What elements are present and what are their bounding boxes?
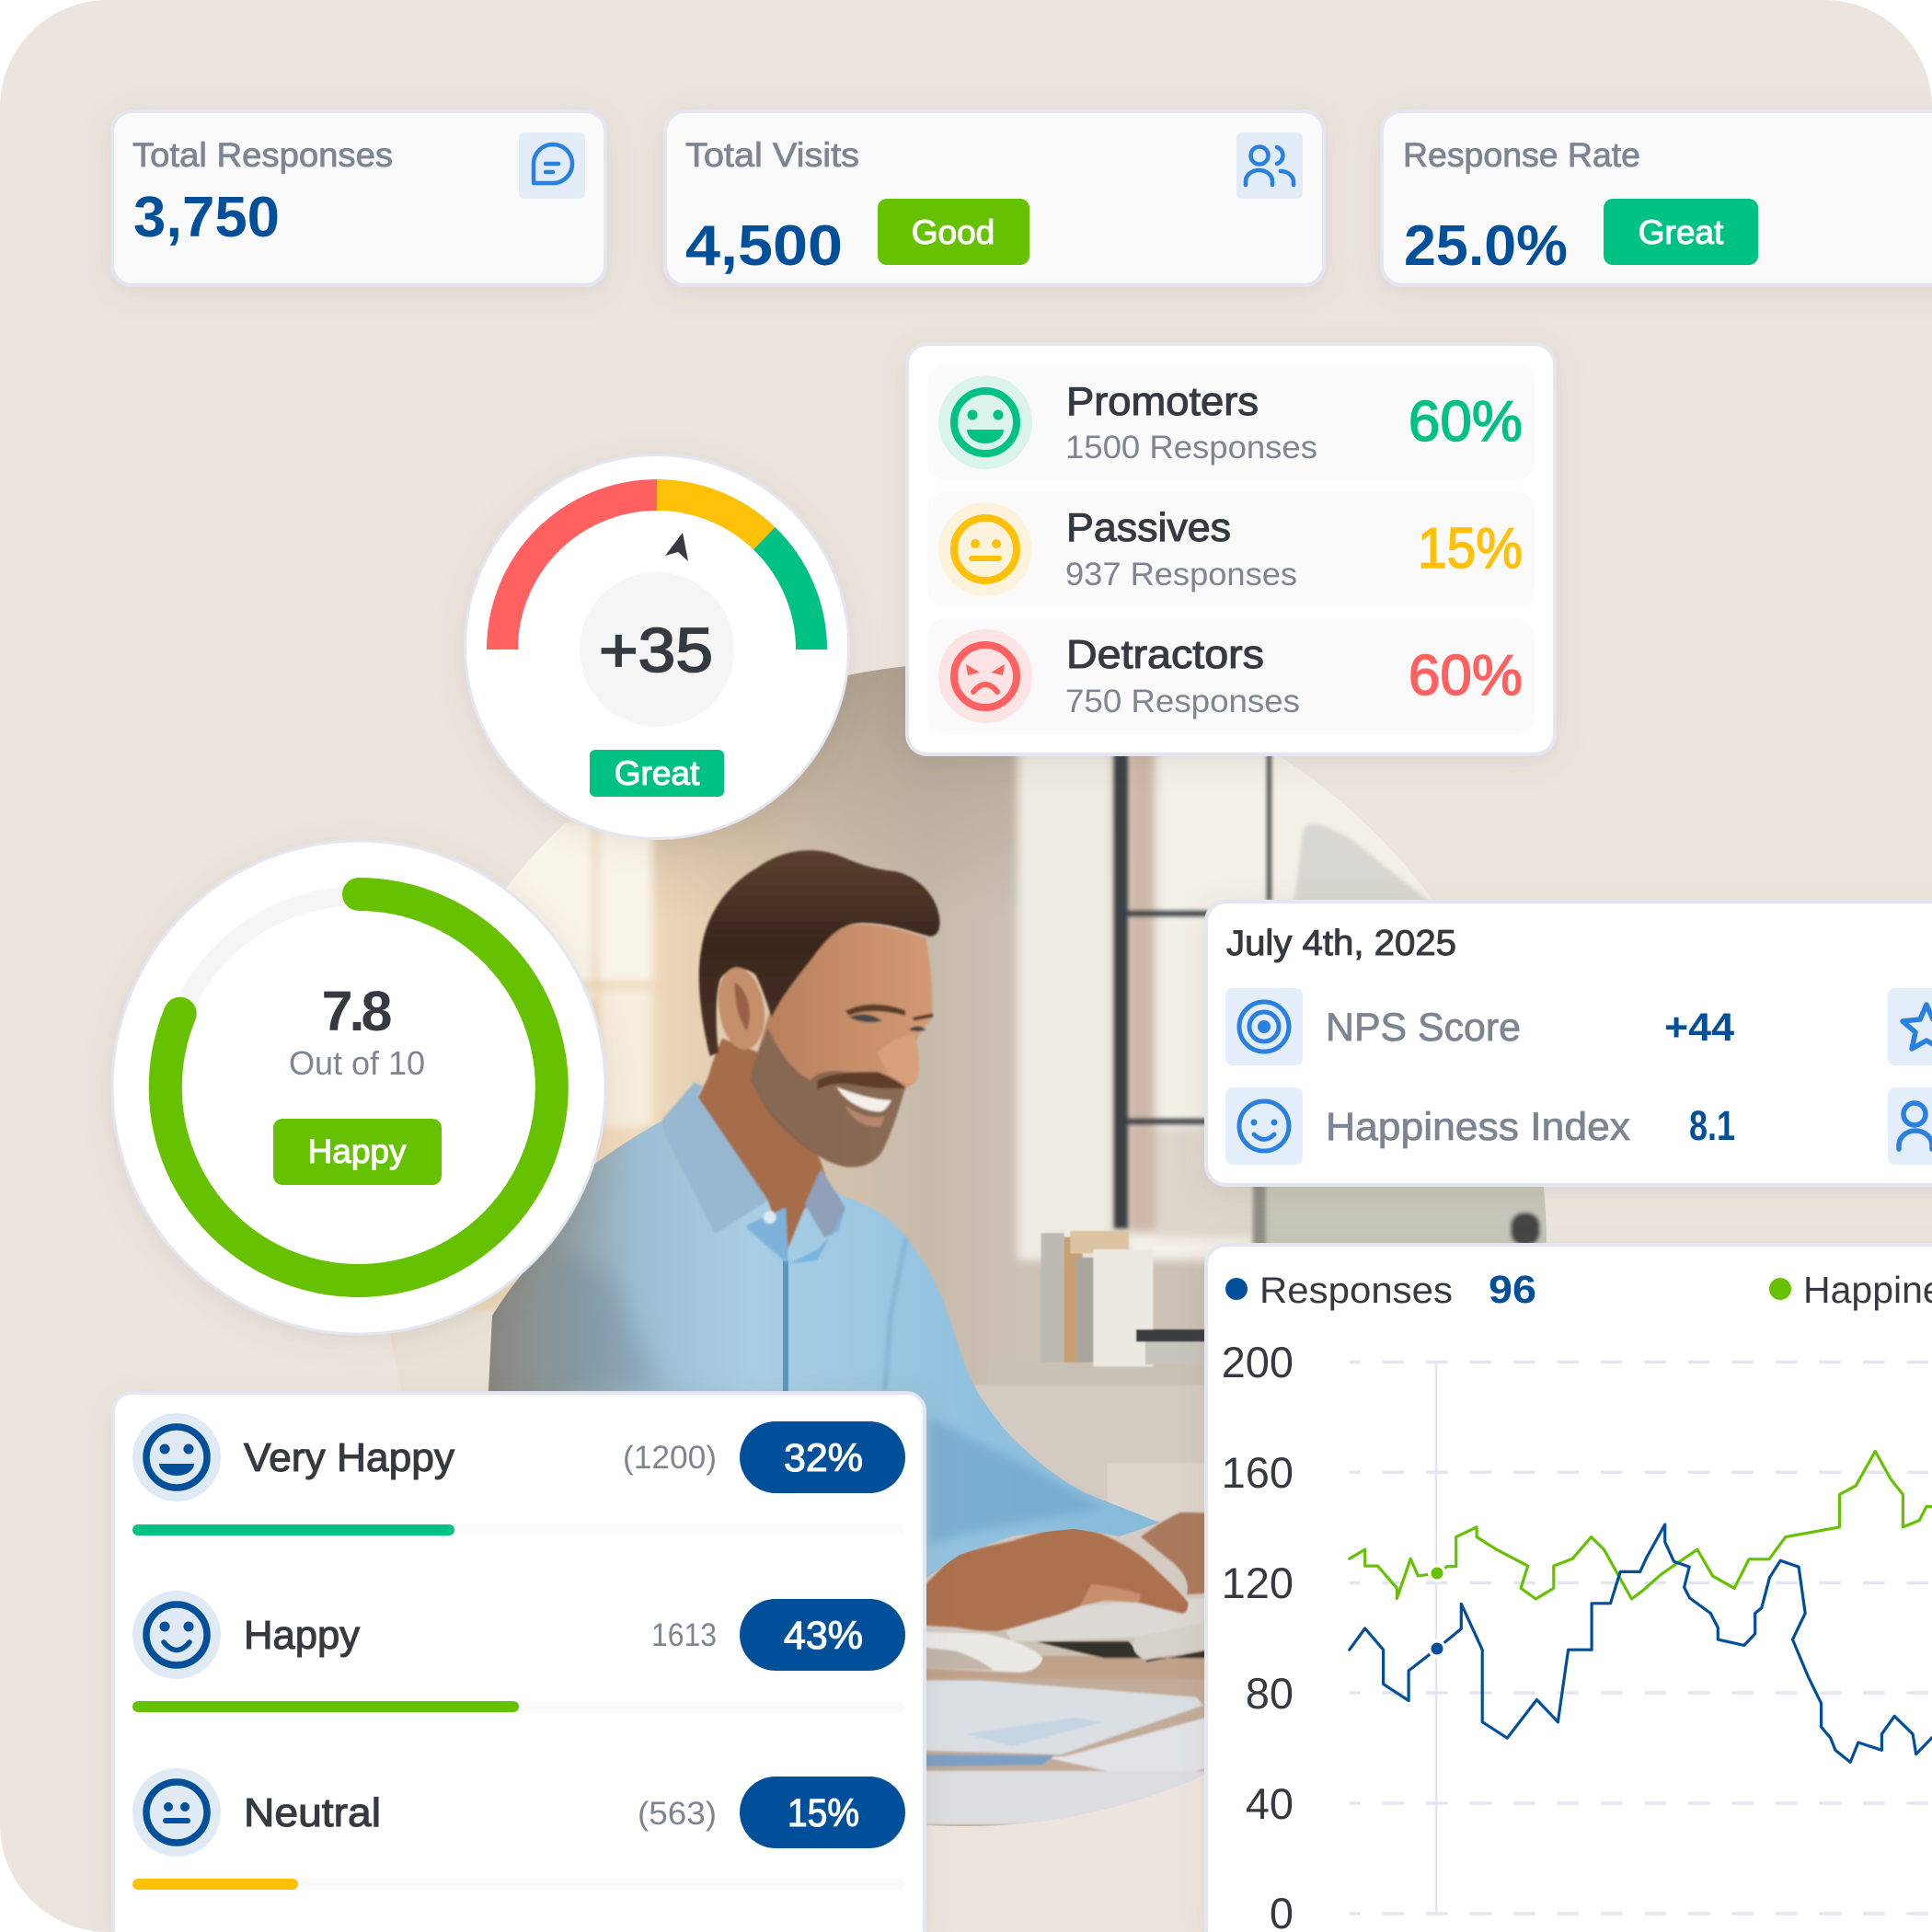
legend: responses: Responses (1259, 1271, 1453, 1311)
row: detractors (927, 618, 1535, 734)
ring caption: Out of 10 (289, 1044, 425, 1082)
badge: great (1604, 199, 1758, 265)
name: neutral: Neutral (244, 1790, 381, 1835)
count: 1200: (1200) (623, 1440, 717, 1476)
panel: daily metrics (1206, 902, 1932, 1185)
panel: sentiment breakdown (113, 1393, 925, 1932)
metric: happiness index: Happiness Index (1326, 1106, 1630, 1149)
percent pill: 32%: 32% (784, 1436, 863, 1480)
stat card: total visits (665, 111, 1324, 285)
icon: chat bubble (519, 132, 585, 199)
name: very happy: Very Happy (244, 1435, 454, 1480)
panel: trend line chart (1206, 1245, 1932, 1932)
metric: NPS score: NPS Score (1326, 1006, 1521, 1050)
count: 1613: 1613 (651, 1617, 717, 1653)
icon: grinning face (938, 375, 1032, 469)
desk, papers, keyboard, mouse and hands (914, 1512, 1221, 1828)
gauge badge: great: Great (615, 754, 700, 792)
value: 4,500: 4,500 (685, 214, 843, 278)
percent: promoters: 60% (1409, 390, 1523, 454)
marker: happiness point (1428, 1564, 1446, 1582)
stat card: total responses (112, 111, 605, 285)
percent pill: 15% (740, 1777, 905, 1848)
row: neutral (132, 1768, 905, 1890)
gauge arc: green segment (765, 538, 811, 650)
ring value: 7.8 (322, 980, 391, 1042)
y axis labels: 200 (1222, 1338, 1294, 1386)
percent pill: 43% (740, 1599, 905, 1671)
progress bar: very happy (132, 1524, 905, 1535)
ring track (181, 896, 359, 1014)
head (662, 850, 940, 1264)
legend: responses: 96 (1489, 1268, 1536, 1312)
picture frame at left (394, 1311, 495, 1398)
y axis labels: 160 (1222, 1448, 1294, 1497)
gauge centre value: +35 (599, 615, 713, 685)
ring badge: happy: Happy (308, 1133, 407, 1170)
ring chart: happiness score (112, 841, 605, 1334)
percent pill: 15%: 15% (788, 1791, 859, 1835)
label: total responses: Total Responses (132, 136, 393, 174)
date heading: July 4th, 2025 (1226, 924, 1456, 963)
percent pill: 32% (740, 1421, 905, 1493)
line: responses series (1350, 1524, 1932, 1762)
y axis labels: 120 (1222, 1558, 1294, 1607)
photo: smiling man working at a keyboard (368, 644, 1586, 1858)
badge: good (878, 199, 1029, 265)
legend: responses (1225, 1268, 1536, 1312)
y axis labels (1222, 1338, 1294, 1932)
gauge: NPS score (466, 454, 848, 839)
row: passives (927, 491, 1535, 607)
value: 8.1: 8.1 (1689, 1102, 1735, 1149)
count: 563: (563) (638, 1796, 717, 1832)
icon: target (1225, 988, 1303, 1065)
gauge arc: yellow segment (657, 495, 765, 538)
responses: promoters: 1500 Responses (1065, 429, 1317, 466)
badge: great: Great (1639, 213, 1724, 251)
name: detractors: Detractors (1066, 632, 1264, 677)
value: 25.0%: 25.0% (1404, 214, 1568, 278)
ring progress (166, 894, 552, 1281)
icon: neutral face (132, 1768, 221, 1857)
name: passives: Passives (1066, 505, 1231, 550)
row: very happy (132, 1413, 905, 1535)
responses: detractors: 750 Responses (1065, 683, 1300, 719)
icon: grinning face (132, 1413, 221, 1501)
progress bar: happy (132, 1701, 905, 1713)
icon: smiling face (132, 1591, 221, 1679)
row: promoters (927, 364, 1535, 480)
value: 3,750: 3,750 (133, 186, 280, 249)
icon: person (1888, 1087, 1932, 1165)
gauge needle arrow (665, 533, 688, 561)
line: happiness series (1350, 1452, 1932, 1599)
icon: two people (1236, 132, 1303, 199)
percent: passives: 15% (1418, 517, 1523, 581)
y axis labels: 80 (1246, 1669, 1294, 1718)
percent pill: 43%: 43% (784, 1614, 863, 1658)
label: total visits: Total Visits (685, 136, 859, 174)
name: promoters: Promoters (1066, 379, 1259, 424)
ring badge: happy (273, 1119, 442, 1185)
gauge badge: great (590, 750, 724, 797)
icon: star (1888, 988, 1932, 1065)
responses: passives: 937 Responses (1065, 556, 1297, 592)
gauge centre value (580, 572, 734, 727)
row: happy (132, 1591, 905, 1713)
shirt (488, 1121, 1159, 1582)
shelf, books and radiator (920, 1231, 1226, 1631)
icon: angry face (938, 629, 1032, 723)
progress bar: neutral (132, 1879, 905, 1890)
icon: smile (1225, 1087, 1303, 1165)
panel: NPS breakdown (907, 344, 1555, 754)
gauge arc: red segment (502, 495, 657, 650)
label: response rate: Response Rate (1403, 136, 1640, 174)
stat card: response rate (1382, 111, 1932, 285)
icon: neutral face (938, 502, 1032, 596)
marker: responses point (1428, 1639, 1446, 1658)
value: +44: +44 (1664, 1006, 1734, 1050)
percent: detractors: 60% (1409, 644, 1523, 707)
y axis labels: 40 (1246, 1779, 1294, 1828)
badge: good: Good (912, 213, 995, 251)
name: happy: Happy (244, 1613, 360, 1658)
